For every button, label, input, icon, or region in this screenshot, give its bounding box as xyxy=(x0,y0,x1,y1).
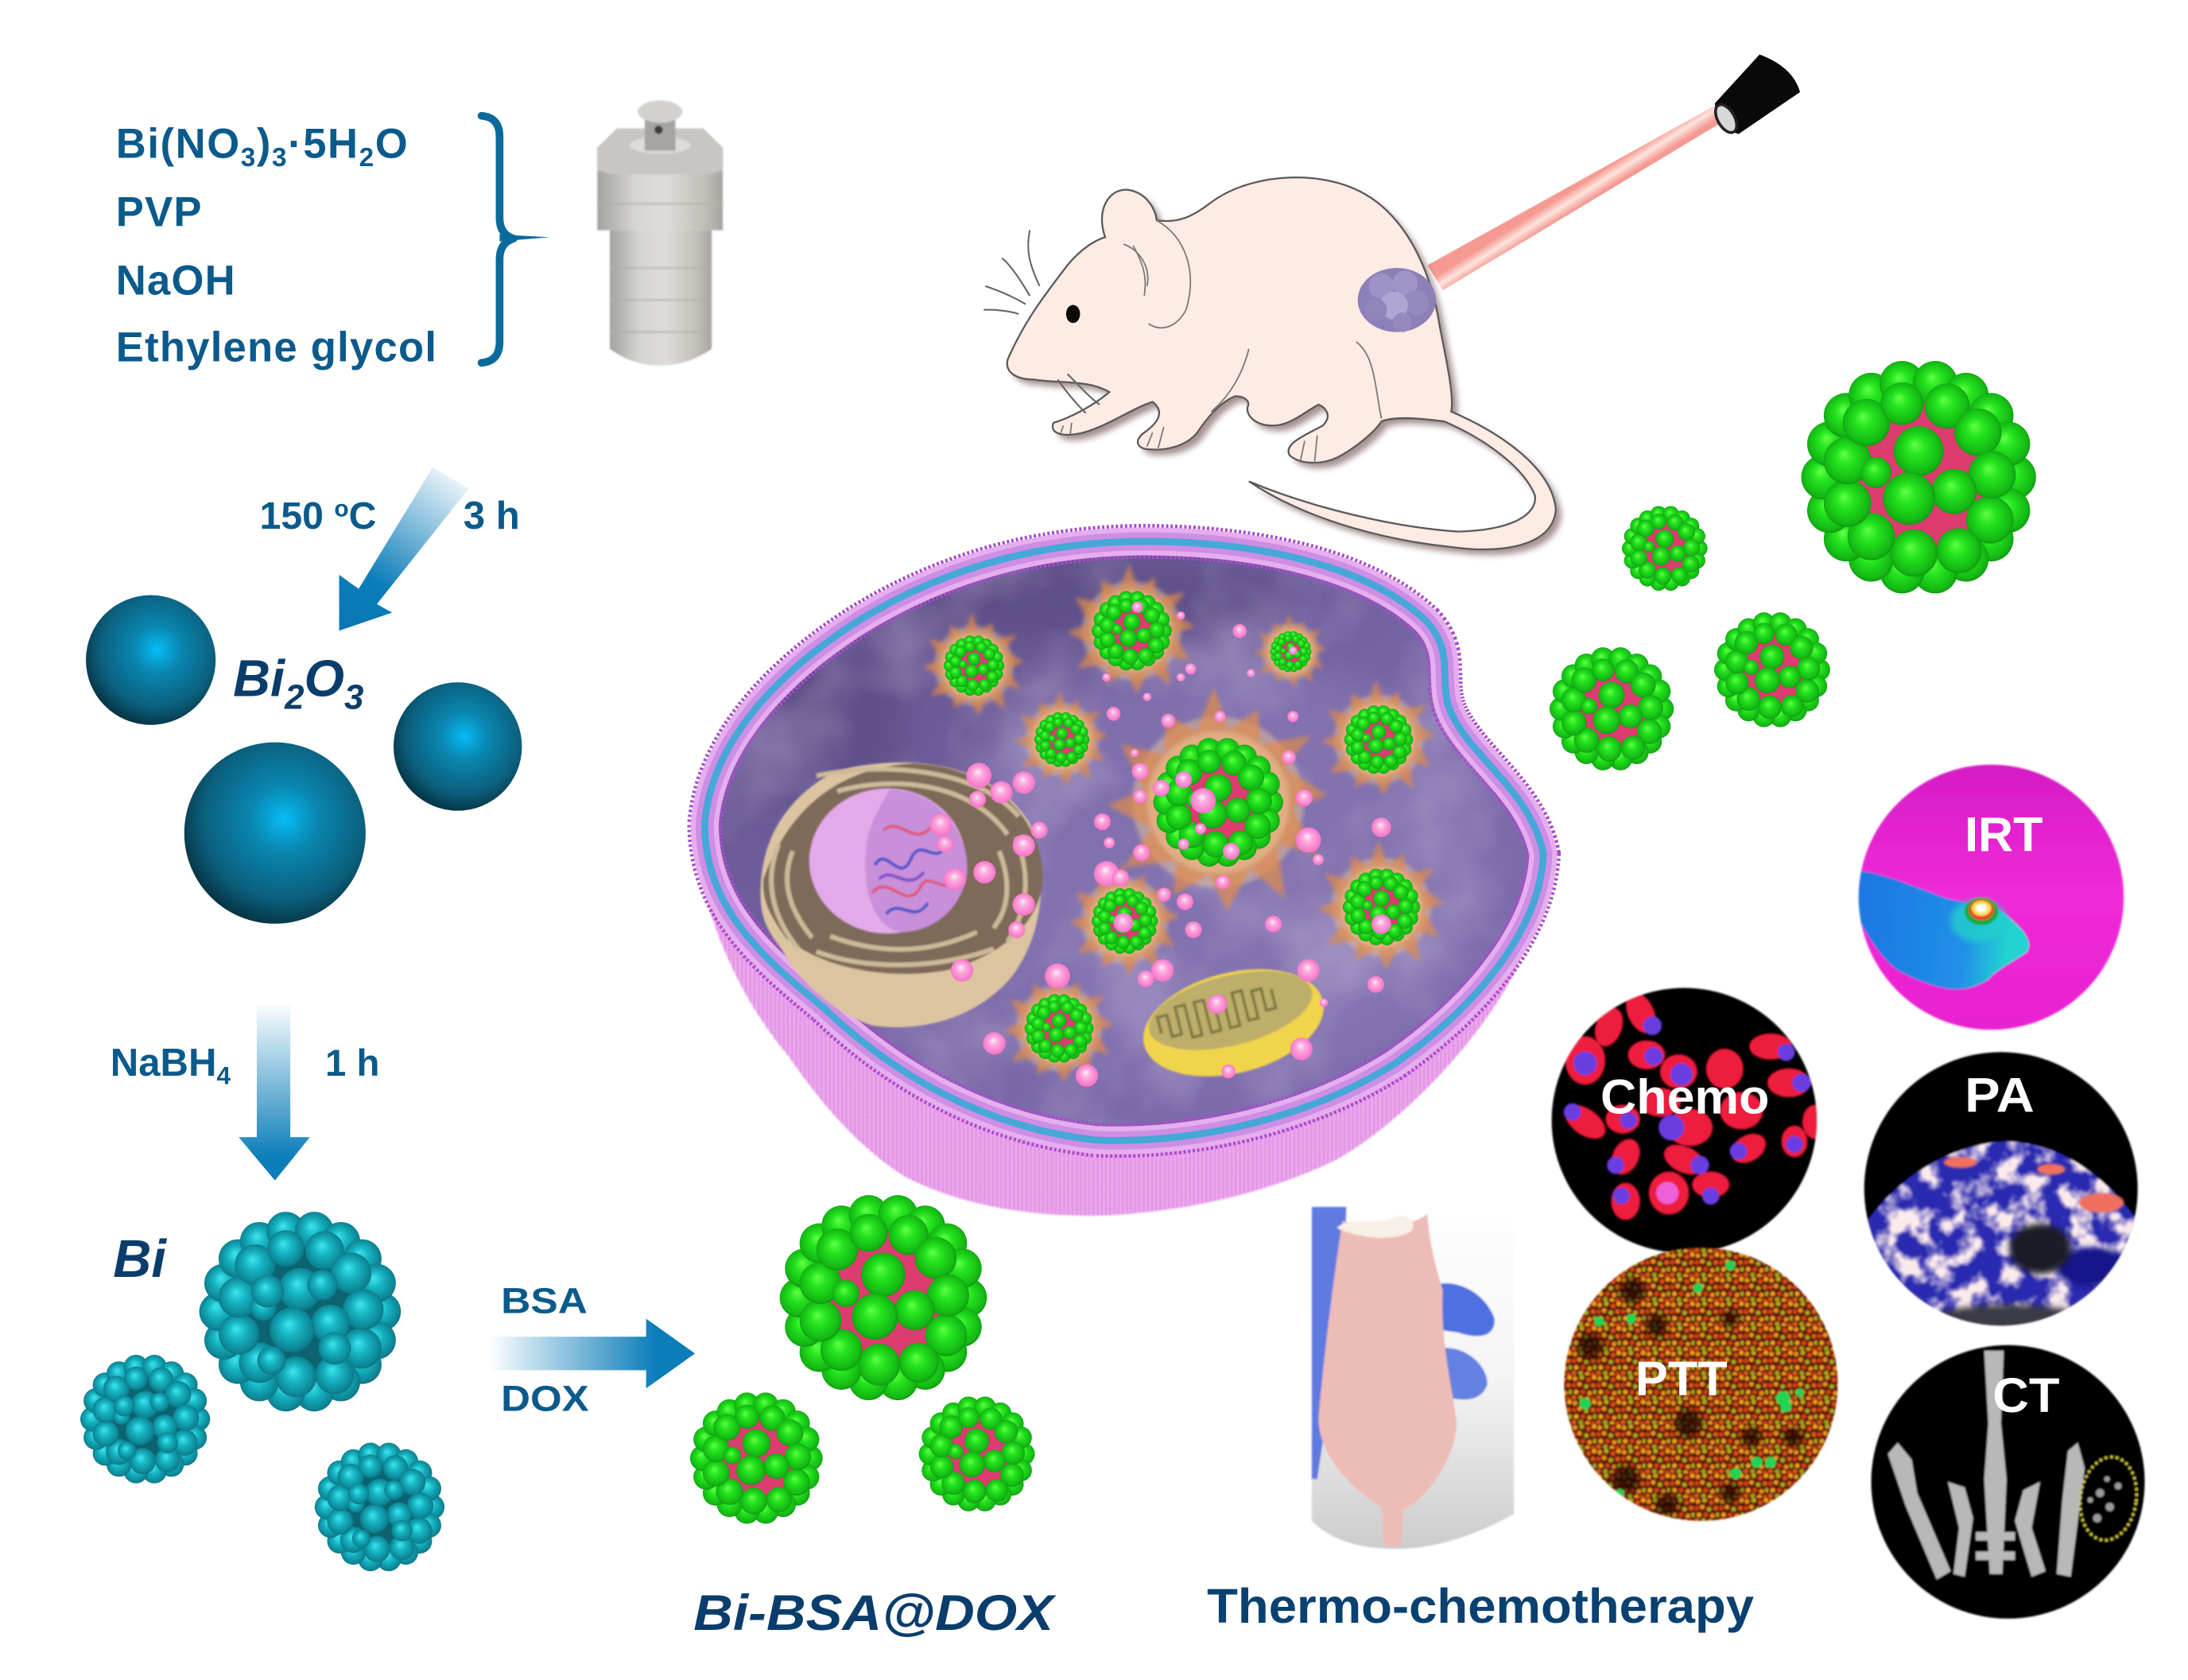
endoplasmic reticulum and nucleus xyxy=(761,762,1042,1027)
membrane rim xyxy=(704,541,1543,1140)
cell bowl xyxy=(693,837,1543,1216)
label: temperature: o xyxy=(334,495,349,522)
label: NaBH4: 4 xyxy=(217,1061,231,1090)
label: BSA: BSA xyxy=(501,1280,588,1321)
cluster xyxy=(1622,506,1708,591)
arrow: reduction step xyxy=(239,1005,310,1181)
drug-loaded clusters with heat flames xyxy=(923,564,1445,1083)
reagent: bismuth nitrate: ) xyxy=(257,120,272,167)
reagent: bismuth nitrate: 3 xyxy=(272,143,288,173)
cluster xyxy=(780,1195,987,1400)
label: IRT: IRT xyxy=(1965,808,2043,863)
curly brace xyxy=(482,116,550,363)
label: Bi: Bi xyxy=(113,1230,167,1289)
mitochondrion xyxy=(1132,952,1335,1094)
laser fibre xyxy=(1427,54,1800,290)
cluster xyxy=(1550,647,1674,770)
label: Bi2O3: O xyxy=(305,650,344,708)
icon: autoclave reactor xyxy=(597,100,723,366)
label: Thermo-chemotherapy: Thermo-chemotherapy xyxy=(1207,1579,1754,1634)
imaging: Chemo xyxy=(1552,988,1828,1253)
sphere xyxy=(184,743,366,924)
arrow: loading step xyxy=(491,1318,695,1388)
label: 3 h: 3 h xyxy=(464,495,520,537)
label: Bi2O3: 2 xyxy=(284,678,305,717)
reagent: bismuth nitrate: ·5H xyxy=(288,120,359,167)
label: PTT: PTT xyxy=(1635,1352,1728,1406)
label: DOX: DOX xyxy=(501,1378,589,1418)
top-right nanoclusters xyxy=(1550,361,2036,770)
label: Chemo: Chemo xyxy=(1600,1069,1769,1124)
label: NaBH4: NaBH xyxy=(111,1042,217,1084)
tumor xyxy=(1358,268,1436,332)
reagent: bismuth nitrate: O xyxy=(375,120,409,167)
cluster xyxy=(919,1396,1035,1511)
label: Bi2O3: Bi xyxy=(233,650,285,708)
released DOX droplets xyxy=(929,602,1391,1087)
arrow: hydrothermal step xyxy=(339,468,469,630)
reagent: PVP: PVP xyxy=(116,188,203,235)
reagent: ethylene glycol: Ethylene glycol xyxy=(116,324,437,371)
sphere xyxy=(86,596,215,725)
imaging: PA xyxy=(1856,1052,2142,1341)
reagent: bismuth nitrate: 2 xyxy=(359,143,375,173)
reagent: NaOH: NaOH xyxy=(116,257,236,304)
laser beam xyxy=(1427,103,1730,290)
nucleus xyxy=(809,789,967,933)
label: temperature: C xyxy=(349,495,377,537)
Bi-BSA@DOX nanoclusters xyxy=(690,1195,1035,1524)
Bi nanoclusters xyxy=(80,1212,444,1571)
cluster xyxy=(80,1355,210,1484)
imaging: PTT xyxy=(1564,1247,1837,1521)
laser head xyxy=(1715,54,1800,134)
label: Bi2O3: 3 xyxy=(344,678,363,717)
imaging: IRT xyxy=(1850,760,2128,1033)
reagent: bismuth nitrate: 3 xyxy=(241,143,257,173)
reagent: bismuth nitrate: Bi(NO xyxy=(116,120,241,167)
illustration: tumor cell xyxy=(684,523,1563,1216)
cytoplasm xyxy=(719,555,1530,1127)
label: PA: PA xyxy=(1965,1069,2035,1123)
label: Bi-BSA@DOX: Bi-BSA@DOX xyxy=(693,1585,1057,1641)
reagent list xyxy=(116,120,437,371)
label: temperature: 150 xyxy=(260,495,324,537)
photo: nude mouse held by gloved hand xyxy=(1309,1205,1519,1553)
cluster xyxy=(200,1212,401,1411)
label: 1 h: 1 h xyxy=(325,1042,379,1084)
sphere xyxy=(394,682,522,811)
label: CT: CT xyxy=(1992,1368,2059,1423)
mouse eye xyxy=(1066,305,1080,323)
cluster xyxy=(315,1443,444,1571)
cluster xyxy=(1714,612,1830,727)
cluster xyxy=(1802,361,2036,593)
cluster xyxy=(690,1392,823,1524)
Bi2O3 spheres xyxy=(86,596,522,924)
imaging: CT xyxy=(1872,1345,2145,1619)
illustration: mouse xyxy=(983,177,1561,555)
